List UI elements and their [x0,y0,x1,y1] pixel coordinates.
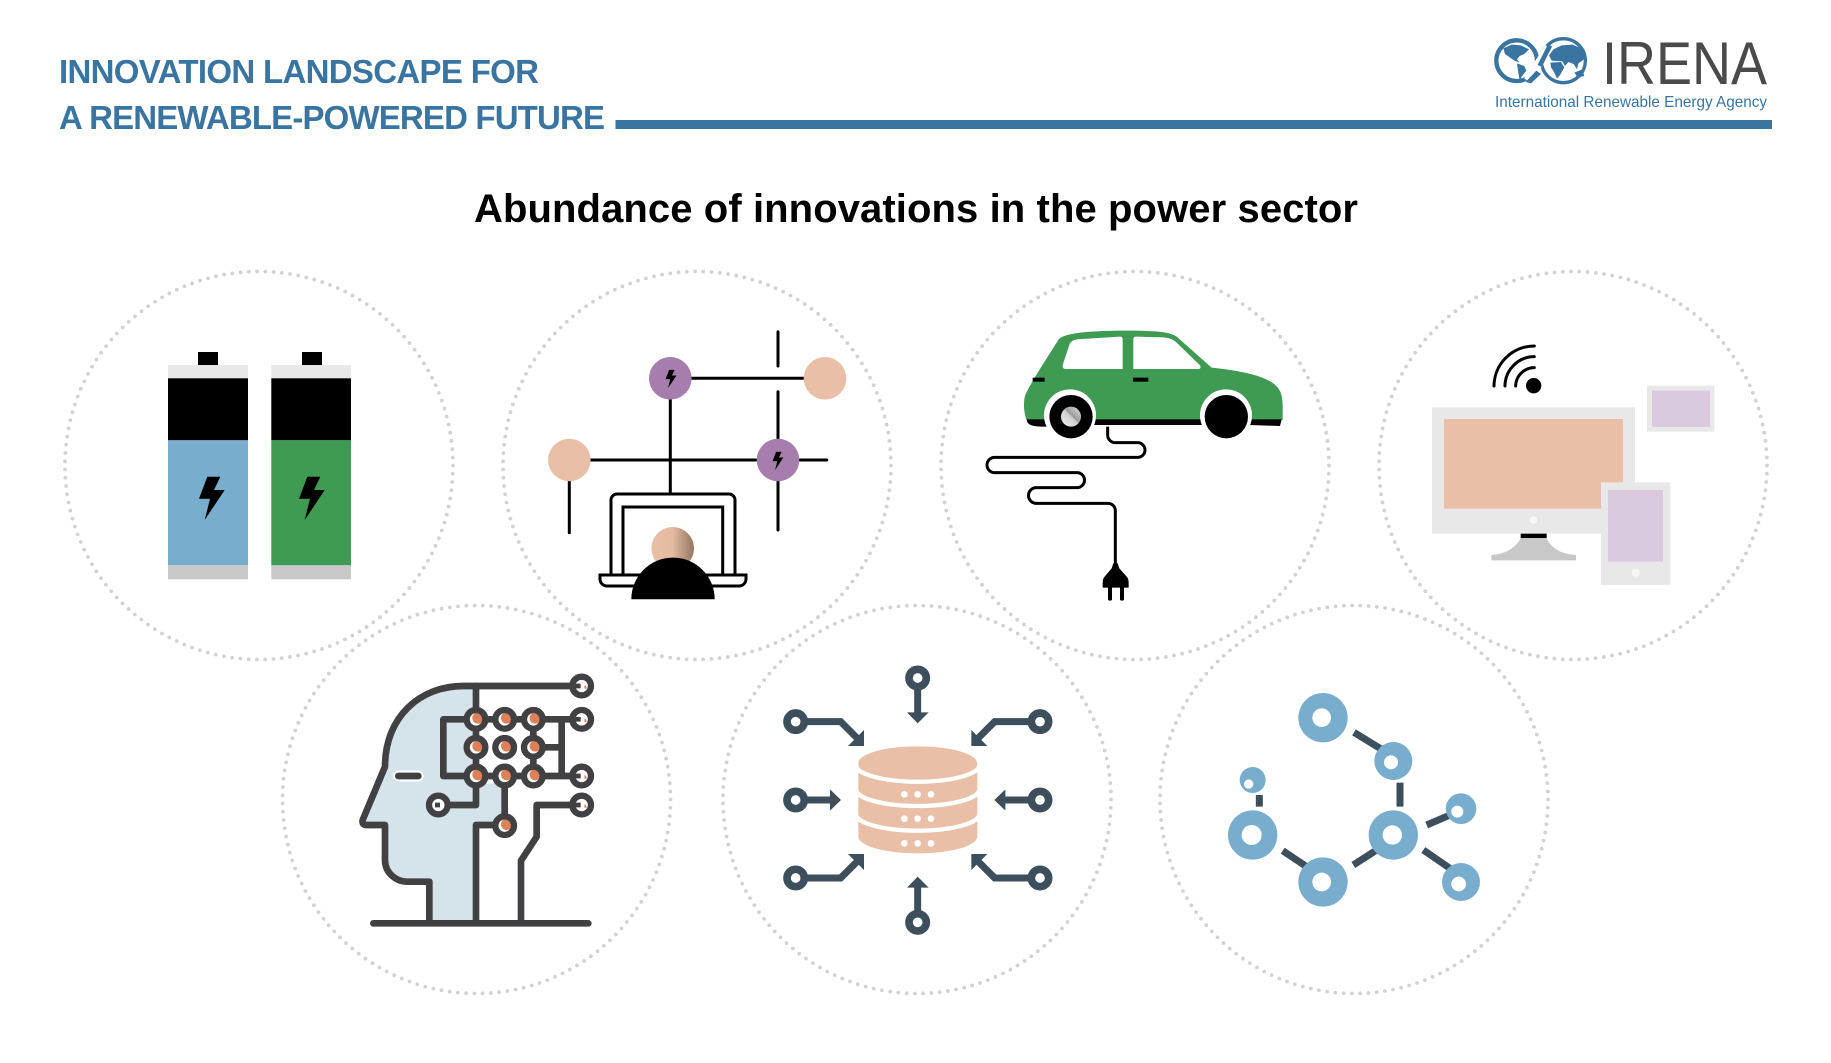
panel: big data [723,606,1111,994]
icon: person [631,527,715,599]
panel: electric vehicle [941,272,1329,660]
icon: grid lines [569,332,827,533]
icon: wheels [1044,389,1096,441]
icon: plug [1103,563,1129,601]
icon: wall display [1647,386,1714,432]
icon: purple nodes [649,357,799,481]
panel: blockchain network [1160,606,1548,994]
logo wordmark: IRENA [1602,30,1767,97]
icon: node rings [429,677,591,835]
header: series title [59,53,605,136]
icon: car body [1024,331,1283,422]
icon: peach nodes [548,357,846,481]
header: series title: INNOVATION LANDSCAPE FOR [59,53,539,90]
panel: batteries [65,272,453,660]
icon: green battery [271,352,351,579]
icon: car windows [1063,337,1123,369]
icon: network links [1259,732,1452,868]
icon: database [856,746,979,853]
icon: AI head [362,677,591,923]
icon: network [1228,693,1480,907]
header rule [616,120,1772,129]
header: series title: A RENEWABLE-POWERED FUTURE [59,99,605,136]
icon: blue battery [168,352,248,579]
icon: charging cable [987,427,1145,567]
icon: orange node centres [472,685,586,830]
panel: smart grid [503,272,891,660]
icon: data flows [787,669,1049,931]
icon: network nodes [1228,693,1480,907]
icon: node backgrounds [429,677,591,835]
panel: artificial intelligence [282,606,670,994]
icon: wifi signal [1494,346,1541,393]
icon: arrows [805,687,1030,913]
icon: devices [1432,346,1714,585]
icon: circuit lines [362,686,588,923]
icon: tablet [1601,482,1670,585]
icon: laptop [600,494,746,586]
icon: car and cable [987,331,1283,601]
logo mark: infinity globes [1496,39,1586,83]
panel: connected devices [1379,272,1767,660]
title: Abundance of innovations in the power sector [474,187,1358,231]
IRENA logo [1495,30,1767,111]
icon: connector rings [787,669,1049,931]
icon: head fill [362,686,503,922]
icon: monitor [1432,407,1635,560]
icon: terminal stubs [435,686,581,805]
logo tagline: International Renewable Energy Agency [1495,94,1767,111]
